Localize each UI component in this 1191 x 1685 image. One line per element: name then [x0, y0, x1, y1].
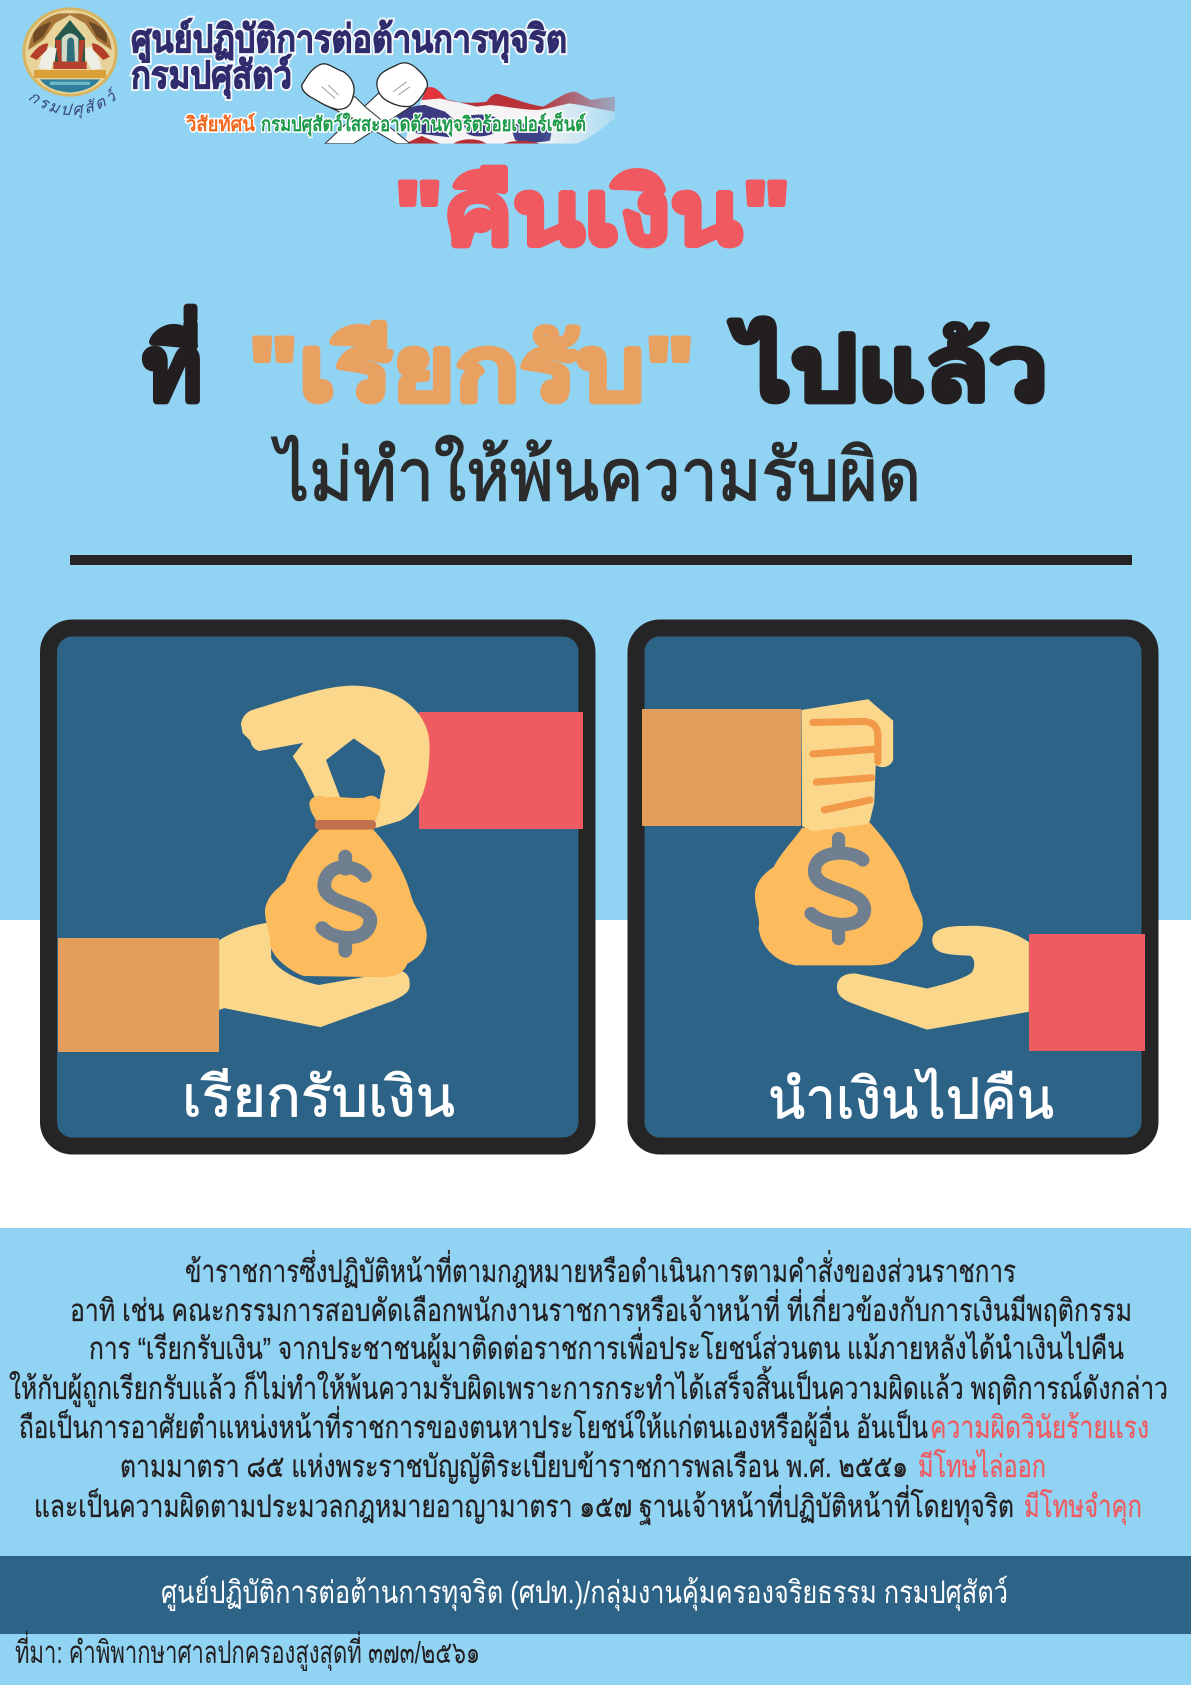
panel label: นำเงินไปคืน: [768, 1067, 1054, 1130]
center name line 2: กรมปศุสัตว์: [131, 54, 292, 99]
icon: department emblem: [22, 7, 118, 118]
footer organisation text: ศูนย์ปฏิบัติการต่อต้านการทุจริต (ศปท.)/กลุ่มงานคุ้มครองจริยธรรม กรมปศุสัตว์: [161, 1575, 1008, 1612]
body line 7 emphasis: มีโทษจำคุก: [1024, 1489, 1142, 1526]
title line 3: ไม่ทำให้พ้นความรับผิด: [271, 435, 921, 516]
center name line 1: ศูนย์ปฏิบัติการต่อต้านการทุจริต: [131, 18, 567, 63]
tan sleeve: [642, 709, 801, 826]
sky background top: [0, 0, 1191, 920]
heading: center name: [131, 18, 567, 99]
icon: crossed fists and flag: [302, 63, 617, 145]
center name line 2 outline: กรมปศุสัตว์: [131, 54, 292, 99]
red sleeve: [419, 712, 583, 829]
title line 1: "คืนเงิน": [394, 164, 791, 264]
vision statement: กรมปศุสัตว์ใสสะอาดต้านทุจริตร้อยเปอร์เซ็นต์: [261, 111, 586, 137]
body line 6 emphasis: มีโทษไล่ออก: [918, 1449, 1046, 1484]
body line 6: ตามมาตรา ๘๕ แห่งพระราชบัญญัติระเบียบข้าราชการพลเรือน พ.ศ. ๒๕๕๑: [120, 1449, 908, 1484]
panel: returning money: [636, 628, 1150, 1146]
title: [143, 164, 1048, 516]
tan sleeve: [58, 938, 219, 1052]
title line 2: black tail: ไปแล้ว: [729, 318, 1048, 420]
body text: [9, 1250, 1168, 1526]
red sleeve: [1029, 934, 1145, 1051]
source note: ที่มา: คำพิพากษาศาลปกครองสูงสุดที่ ๓๗๓/๒๕๖๑: [15, 1631, 480, 1672]
divider: [70, 555, 1132, 565]
title line 2: orange: "เรียกรับ": [248, 320, 695, 420]
center name line 1 outline: ศูนย์ปฏิบัติการต่อต้านการทุจริต: [131, 18, 567, 63]
title line 2: black lead: ที่: [143, 306, 202, 420]
panel label: เรียกรับเงิน: [182, 1065, 455, 1128]
footer band: [0, 1556, 1191, 1634]
vision label: วิสัยทัศน์: [185, 113, 255, 136]
illustration: hands and money bag: [755, 699, 1029, 1030]
illustration: hands and money bag: [219, 686, 430, 1027]
white background band: [0, 920, 1191, 1228]
panel: demanding money: [48, 628, 587, 1146]
emblem caption: กรมปศุสัตว์: [28, 86, 116, 118]
body line 5: ถือเป็นการอาศัยตำแหน่งหน้าที่ราชการของตนหาประโยชน์ให้แก่ตนเองหรือผู้อื่น อันเป็น: [19, 1406, 928, 1446]
sky background bottom: [0, 1228, 1191, 1685]
